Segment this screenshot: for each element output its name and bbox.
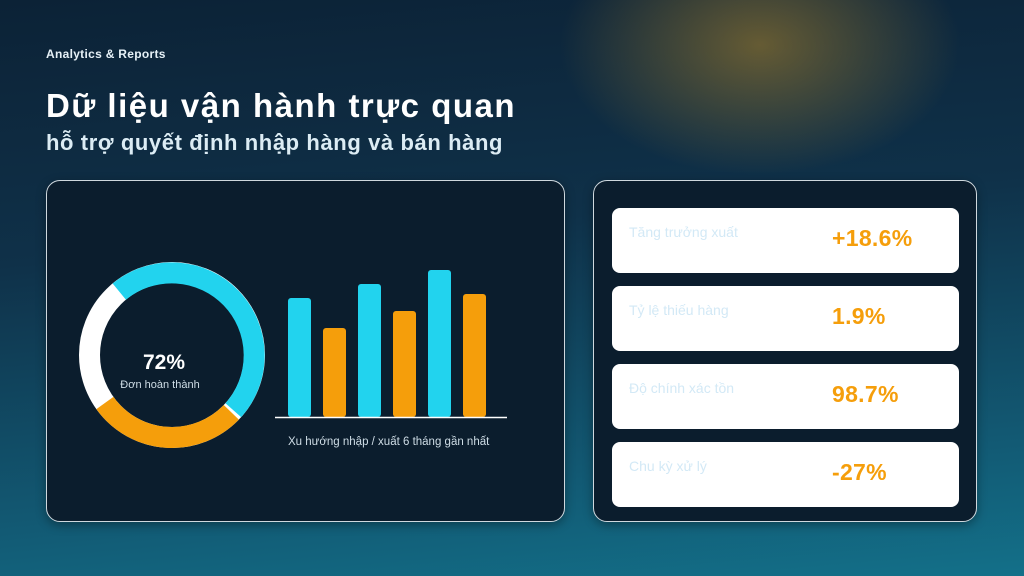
kpi: cycle: Chu kỳ xử lý — [629, 458, 707, 474]
bar chart: Xu hướng nhập / xuất 6 tháng gần nhất — [288, 436, 490, 448]
subtitle: hỗ trợ quyết định nhập hàng và bán hàng — [46, 130, 503, 155]
kpi: cycle — [612, 442, 959, 507]
kpi: growth: +18.6% — [832, 225, 912, 251]
donut chart — [90, 272, 254, 438]
kpi: growth: Tăng trưởng xuất — [629, 224, 738, 240]
kpi: growth — [612, 208, 959, 273]
kpi: shortage: 1.9% — [832, 303, 886, 329]
title: Dữ liệu vận hành trực quan — [46, 87, 516, 124]
kpi: accuracy: 98.7% — [832, 381, 899, 407]
panel: charts — [46, 180, 565, 522]
chart: donut and bars — [79, 262, 507, 448]
kpi: accuracy: Độ chính xác tồn — [629, 380, 734, 396]
kpi: accuracy — [612, 364, 959, 429]
bar chart — [275, 270, 507, 448]
kpi: shortage: Tỷ lệ thiếu hàng — [629, 302, 729, 318]
kpi: cycle: -27% — [832, 459, 887, 485]
donut chart: Đơn hoàn thành — [120, 379, 200, 391]
panel: KPIs — [593, 180, 977, 522]
donut chart: 72% — [143, 351, 185, 374]
eyebrow label: Analytics & Reports — [46, 47, 166, 61]
kpi: shortage — [612, 286, 959, 351]
